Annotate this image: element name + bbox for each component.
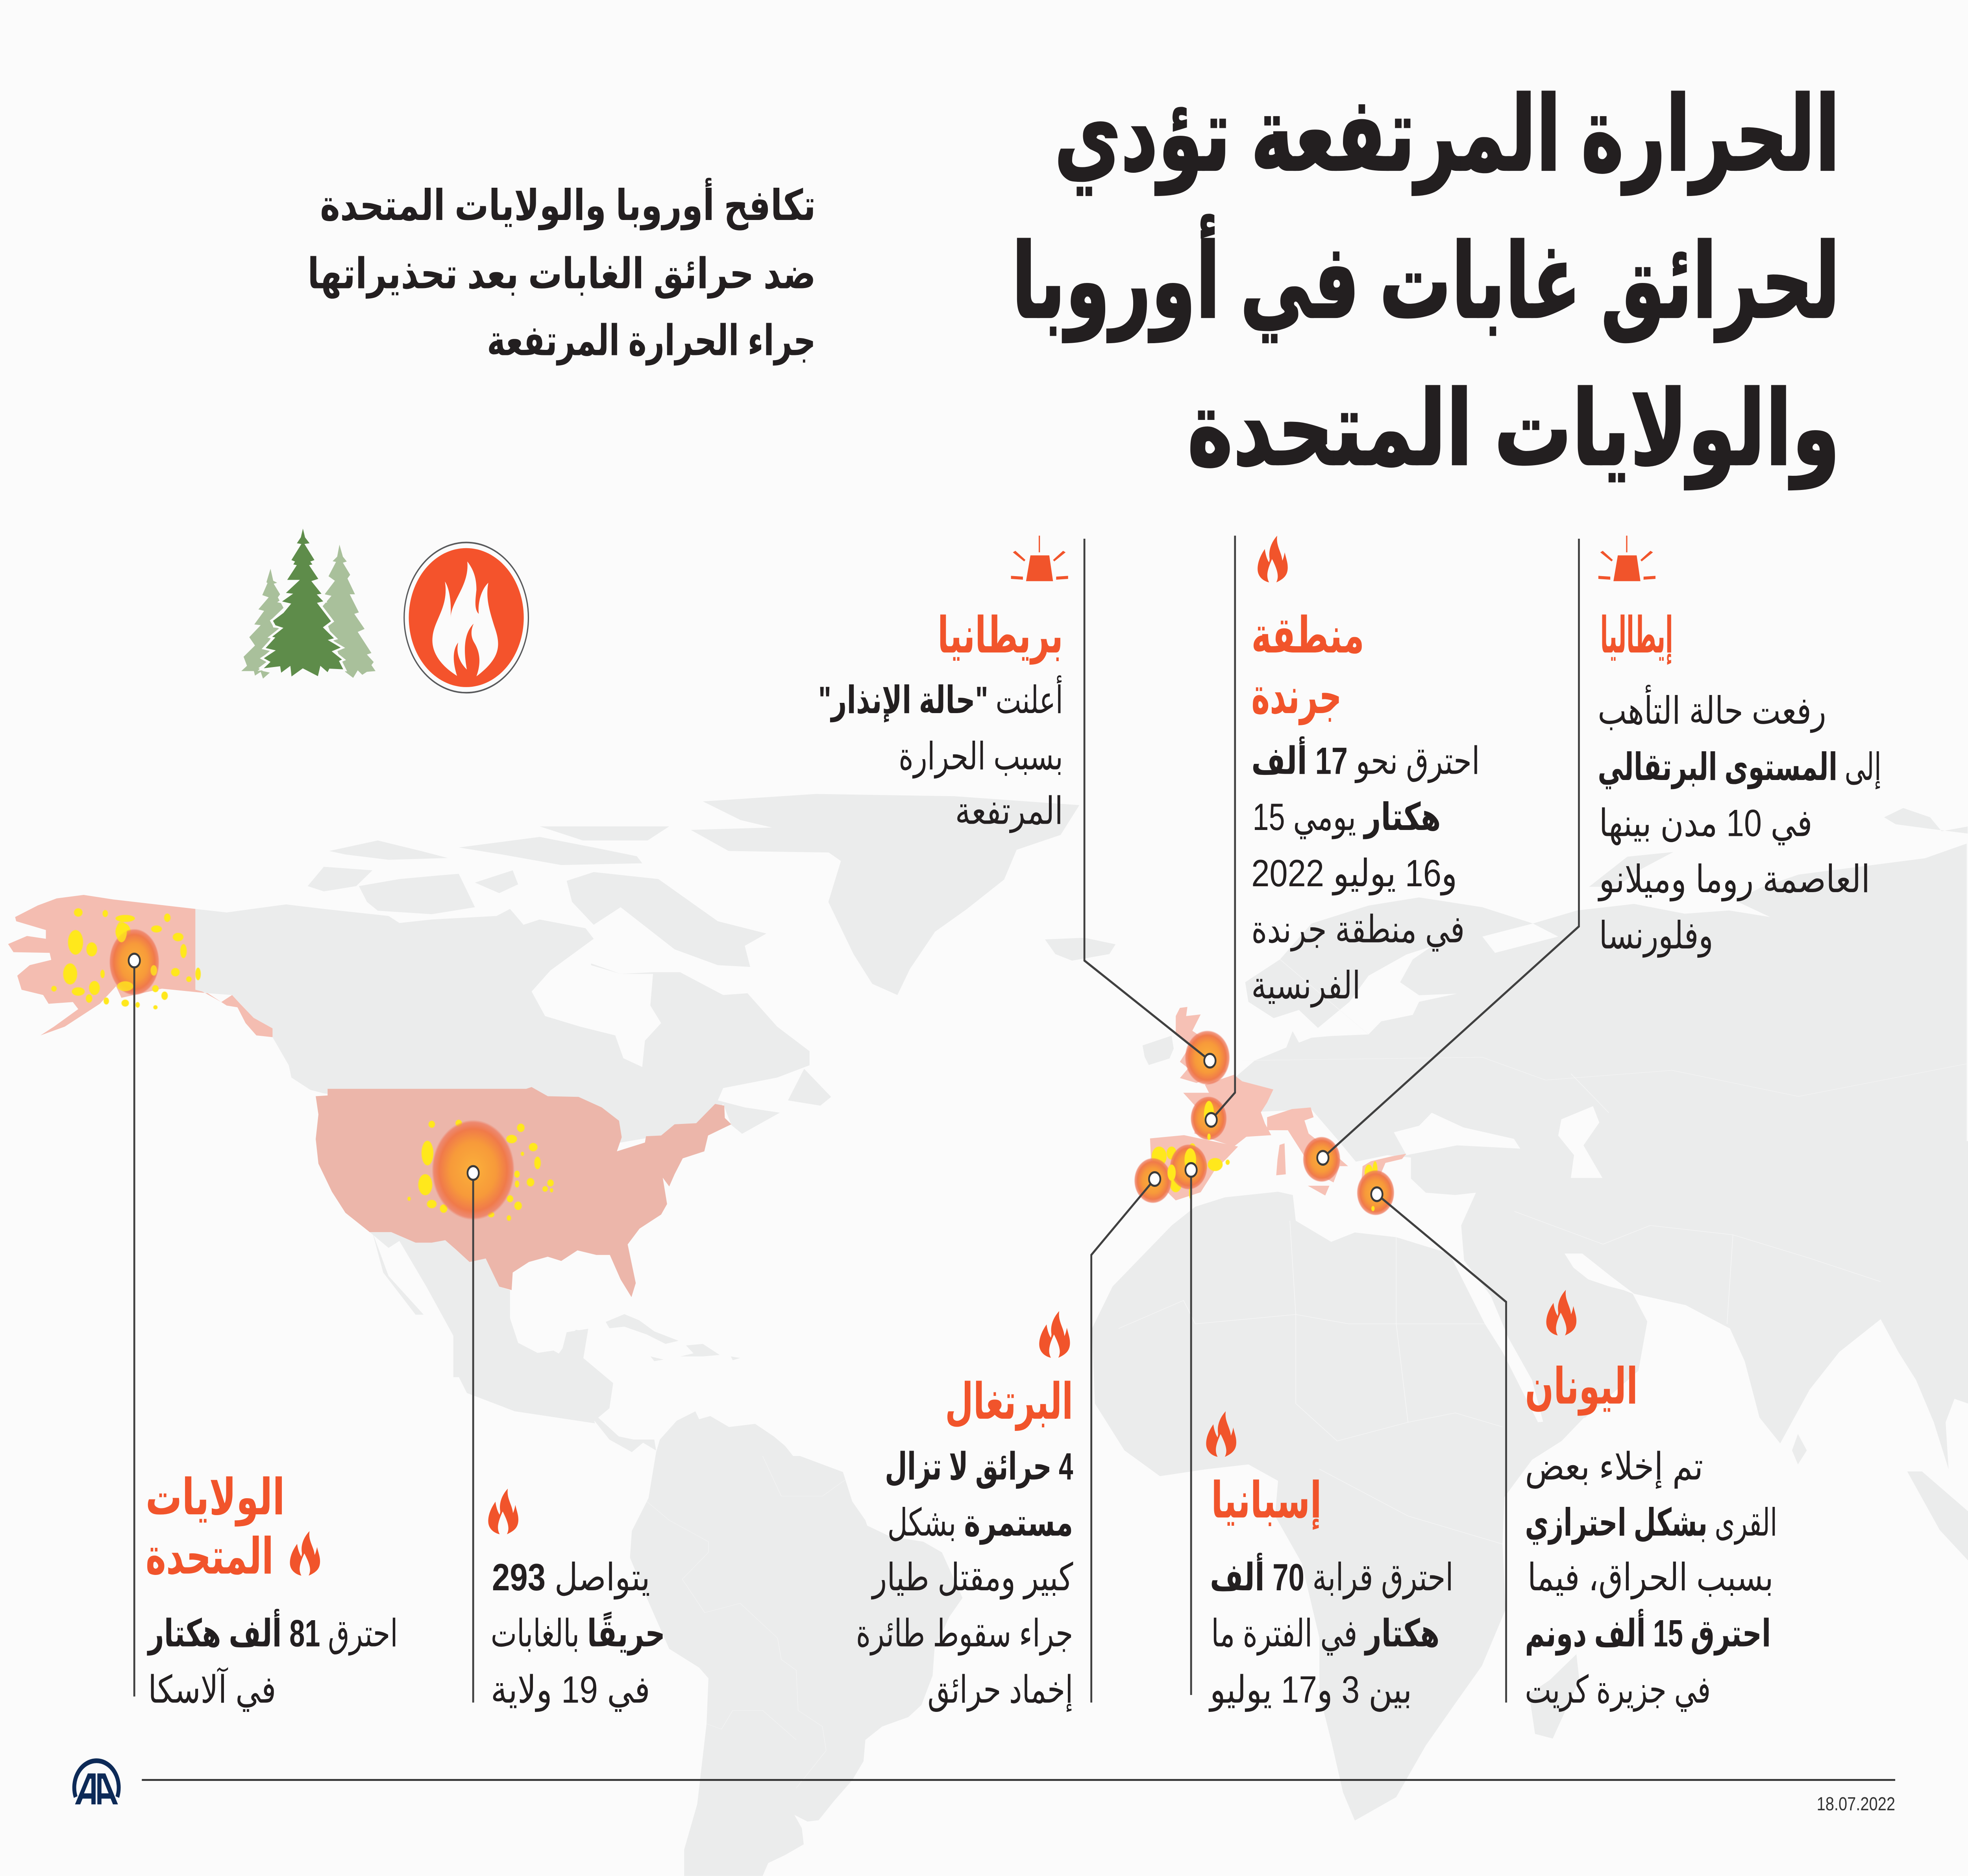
callout: Portugal: البرتغال bbox=[945, 1373, 1073, 1431]
callout: Greece: القرى بشكل احترازي bbox=[1525, 1501, 1777, 1545]
landmass: Arctic islands bbox=[1589, 808, 1968, 887]
icon: flame bbox=[1546, 1290, 1576, 1336]
callout: Italy: إلى المستوى البرتقالي bbox=[1598, 746, 1881, 789]
subtitle: تكافح أوروبا والولايات المتحدة bbox=[320, 177, 816, 231]
date: 18.07.2022 bbox=[1817, 1794, 1895, 1815]
faint country borders bbox=[647, 959, 1967, 1788]
leader line: Spain bbox=[1186, 1163, 1197, 1695]
callout: Spain: إسبانيا bbox=[1211, 1472, 1322, 1530]
landmass: Central America and Caribbean bbox=[553, 1314, 852, 1508]
callout: Greece: احترق 15 ألف دونم bbox=[1525, 1609, 1771, 1656]
callout: Portugal bbox=[856, 1311, 1073, 1712]
callout: Gironde: جرندة bbox=[1251, 668, 1342, 726]
callout: United States / Alaska bbox=[146, 1469, 398, 1712]
callout: Italy: رفعت حالة التأهب bbox=[1598, 685, 1826, 733]
highlighted country: United States (Alaska and contiguous states) bbox=[8, 895, 731, 1297]
icon: siren bbox=[1011, 536, 1068, 581]
icon: siren bbox=[1598, 536, 1655, 581]
leader line: Greece bbox=[1371, 1187, 1506, 1702]
landmass: Greenland bbox=[703, 794, 1079, 995]
callout: USA wildfires bbox=[488, 1489, 665, 1712]
landmass: Africa, Middle East and South Asia bbox=[1092, 1141, 1968, 1821]
callout: USA wildfires: يتواصل 293 bbox=[492, 1556, 650, 1600]
leader line: Portugal bbox=[1091, 1172, 1160, 1702]
icon: flame bbox=[290, 1531, 320, 1576]
icon: flame bbox=[1258, 536, 1288, 582]
landmass: Iceland and Ireland bbox=[1045, 938, 1174, 1065]
leader line: Britain bbox=[1084, 539, 1215, 1068]
callout: Greece: تم إخلاء بعض bbox=[1525, 1445, 1703, 1489]
landmass: North America bbox=[195, 826, 846, 1377]
icon: fire badge bbox=[404, 542, 528, 693]
callout: Italy: العاصمة روما وميلانو bbox=[1598, 858, 1870, 902]
callout: United States / Alaska: الولايات bbox=[146, 1469, 285, 1527]
callout: Gironde: احترق نحو 17 ألف bbox=[1251, 736, 1480, 783]
icon: flame bbox=[1039, 1311, 1070, 1358]
callout: Italy bbox=[1598, 536, 1881, 958]
callout: Portugal: كبير ومقتل طيار bbox=[871, 1556, 1073, 1600]
callout: United States / Alaska: في آلاسكا bbox=[148, 1667, 276, 1712]
callout: USA wildfires: في 19 ولاية bbox=[491, 1668, 650, 1712]
leader line: Italy bbox=[1317, 539, 1579, 1164]
world map bbox=[195, 794, 1968, 1876]
title: الحرارة المرتفعة تؤدي bbox=[1054, 76, 1840, 195]
fire glow: contiguous USA bbox=[407, 1120, 554, 1221]
subtitle: ضد حرائق الغابات بعد تحذيراتها bbox=[307, 250, 816, 299]
callout: Gironde: منطقة bbox=[1251, 607, 1364, 663]
highlighted countries: Europe bbox=[1149, 1007, 1406, 1205]
callout: Italy: في 10 مدن بينها bbox=[1599, 802, 1813, 846]
callout: Gironde: في منطقة جرندة bbox=[1251, 908, 1465, 952]
callout: Gironde: و16 يوليو 2022 bbox=[1251, 852, 1457, 896]
subtitle bbox=[307, 177, 816, 365]
callout: Portugal: إخماد حرائق bbox=[928, 1668, 1073, 1712]
callout: United States / Alaska: المتحدة bbox=[146, 1528, 274, 1584]
callout: Greece bbox=[1525, 1290, 1777, 1712]
seas: Black Sea and Caspian bbox=[1394, 1106, 1602, 1178]
title: والولايات المتحدة bbox=[1187, 371, 1840, 490]
title bbox=[1012, 76, 1840, 490]
callout: Spain: احترق قرابة 70 ألف bbox=[1210, 1553, 1454, 1600]
logo: AA bbox=[74, 1761, 119, 1804]
callout: USA wildfires: حريقًا بالغابات bbox=[491, 1612, 665, 1656]
callout: Gironde: هكتار يومي 15 bbox=[1252, 796, 1441, 839]
icon: flame bbox=[1206, 1411, 1236, 1457]
icon: pine trees bbox=[241, 523, 375, 678]
callout: Spain: بين 3 و17 يوليو bbox=[1208, 1668, 1412, 1712]
callout: Britain: أعلنت "حالة الإنذار" bbox=[818, 675, 1063, 723]
subtitle: جراء الحرارة المرتفعة bbox=[487, 316, 816, 365]
leader line: Gironde bbox=[1206, 536, 1235, 1127]
callout: Spain bbox=[1206, 1411, 1454, 1712]
landmass: South America bbox=[630, 1456, 962, 1876]
callout: Greece: بسبب الحراق، فيما bbox=[1528, 1556, 1774, 1600]
callout: Portugal: 4 حرائق لا تزال bbox=[885, 1445, 1073, 1489]
landmass: southern Mexico bbox=[453, 1351, 595, 1423]
leader line: USA wildfires bbox=[468, 1166, 479, 1702]
callout: Greece: اليونان bbox=[1525, 1358, 1638, 1416]
landmass: Europe and Russia bbox=[1236, 844, 1967, 1178]
sea: Hudson Bay bbox=[532, 939, 661, 1067]
callout: Portugal: مستمرة بشكل bbox=[887, 1501, 1073, 1545]
callout: Italy: وفلورنسا bbox=[1599, 914, 1713, 958]
callout: Greece: في جزيرة كريت bbox=[1525, 1668, 1711, 1712]
callout: Spain: هكتار في الفترة ما bbox=[1211, 1612, 1440, 1656]
callout: United States / Alaska: احترق 81 ألف هكتار bbox=[147, 1609, 398, 1656]
callout: Britain: بريطانيا bbox=[938, 607, 1063, 665]
callout: Gironde: الفرنسية bbox=[1251, 964, 1361, 1008]
callout: Britain: بسبب الحرارة bbox=[899, 735, 1063, 779]
callout: Britain: المرتفعة bbox=[955, 790, 1063, 834]
callout: Gironde bbox=[1251, 536, 1480, 1008]
callout: Portugal: جراء سقوط طائرة bbox=[856, 1612, 1073, 1656]
callout: Italy: إيطاليا bbox=[1600, 607, 1673, 665]
callout: Britain bbox=[818, 536, 1068, 834]
fire glow: Alaska bbox=[51, 908, 201, 1009]
icon: flame bbox=[488, 1489, 518, 1534]
leader line: Alaska bbox=[129, 954, 140, 1697]
fire glows: Europe bbox=[1134, 1030, 1395, 1216]
